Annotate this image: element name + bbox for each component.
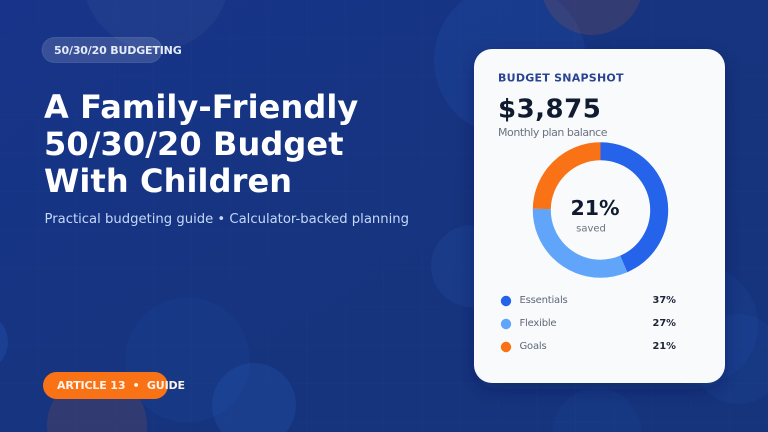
legend: flexible — [501, 318, 676, 329]
title: 50/30/20 Budget — [44, 125, 344, 163]
article tag: ARTICLE 13 • GUIDE — [57, 379, 185, 392]
balance caption: Monthly plan balance — [498, 126, 608, 139]
card heading: BUDGET SNAPSHOT — [498, 72, 624, 84]
legend: goals: Goals — [520, 341, 546, 352]
legend: essentials: 37% — [652, 295, 676, 306]
legend: flexible: Flexible — [520, 318, 556, 329]
title — [44, 88, 358, 200]
badge: 50/30/20 budgeting — [42, 38, 182, 62]
article tag — [43, 372, 185, 399]
legend: essentials — [501, 295, 676, 306]
legend: flexible: 27% — [652, 318, 676, 329]
legend: essentials: Essentials — [520, 295, 568, 306]
legend: goals — [501, 341, 676, 352]
donut chart — [542, 151, 659, 269]
title: With Children — [44, 162, 292, 200]
donut centre value: 21% — [570, 196, 620, 220]
balance amount: $3,875 — [498, 94, 601, 124]
panel: budget snapshot card — [474, 49, 725, 383]
donut centre caption: saved — [576, 224, 606, 234]
legend: goals: 21% — [652, 341, 676, 352]
badge: 50/30/20 budgeting: 50/30/20 BUDGETING — [54, 44, 182, 57]
title: A Family-Friendly — [44, 88, 358, 126]
subtitle: Practical budgeting guide • Calculator-backed planning — [44, 212, 409, 227]
